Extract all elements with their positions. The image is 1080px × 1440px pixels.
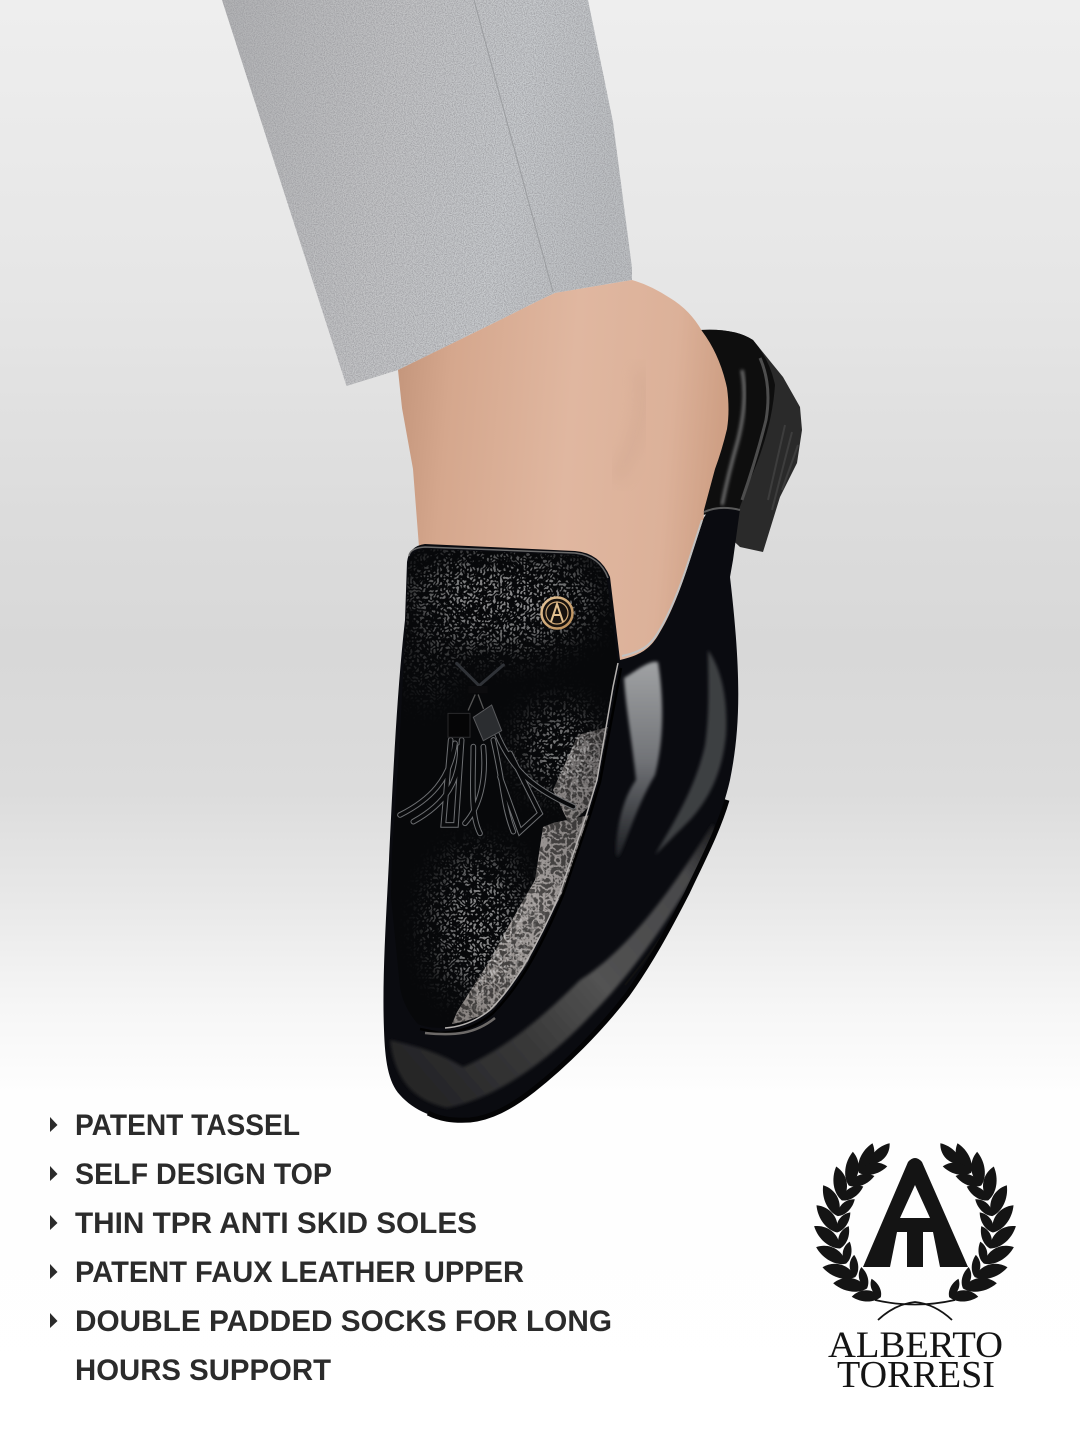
brand badge on shoe [542, 598, 572, 628]
brand logo [813, 1142, 1017, 1396]
icon: AT monogram [863, 1158, 968, 1267]
topline piping [622, 520, 702, 656]
brand name: ALBERTO [828, 1325, 1003, 1366]
bullet and feature: self design top: SELF DESIGN TOP [75, 1158, 332, 1191]
heel block and back counter [690, 330, 802, 552]
textured apron [380, 540, 621, 1034]
collar piping and stitching [704, 508, 740, 512]
shoe body [383, 508, 740, 1120]
icon: laurel wreath [813, 1142, 1017, 1320]
bullet and feature: double padded socks: DOUBLE PADDED SOCKS FOR LONG [75, 1305, 612, 1338]
tassel [400, 663, 573, 833]
bare foot [398, 280, 728, 680]
bullet and feature: patent tassel: PATENT TASSEL [75, 1109, 300, 1142]
bullet and feature: faux leather upper: PATENT FAUX LEATHER UPPER [75, 1256, 524, 1289]
bullet and feature: double padded socks: HOURS SUPPORT [75, 1354, 331, 1387]
trouser leg [222, 0, 632, 386]
bullet and feature: double padded socks [50, 1305, 612, 1387]
feature list [50, 1109, 612, 1387]
brand name: TORRESI [837, 1354, 995, 1396]
sole edge [428, 800, 727, 1120]
brand name [828, 1325, 1003, 1396]
bullet and feature: anti skid soles: THIN TPR ANTI SKID SOLES [75, 1207, 477, 1240]
glossy reflections on side [390, 650, 726, 1108]
